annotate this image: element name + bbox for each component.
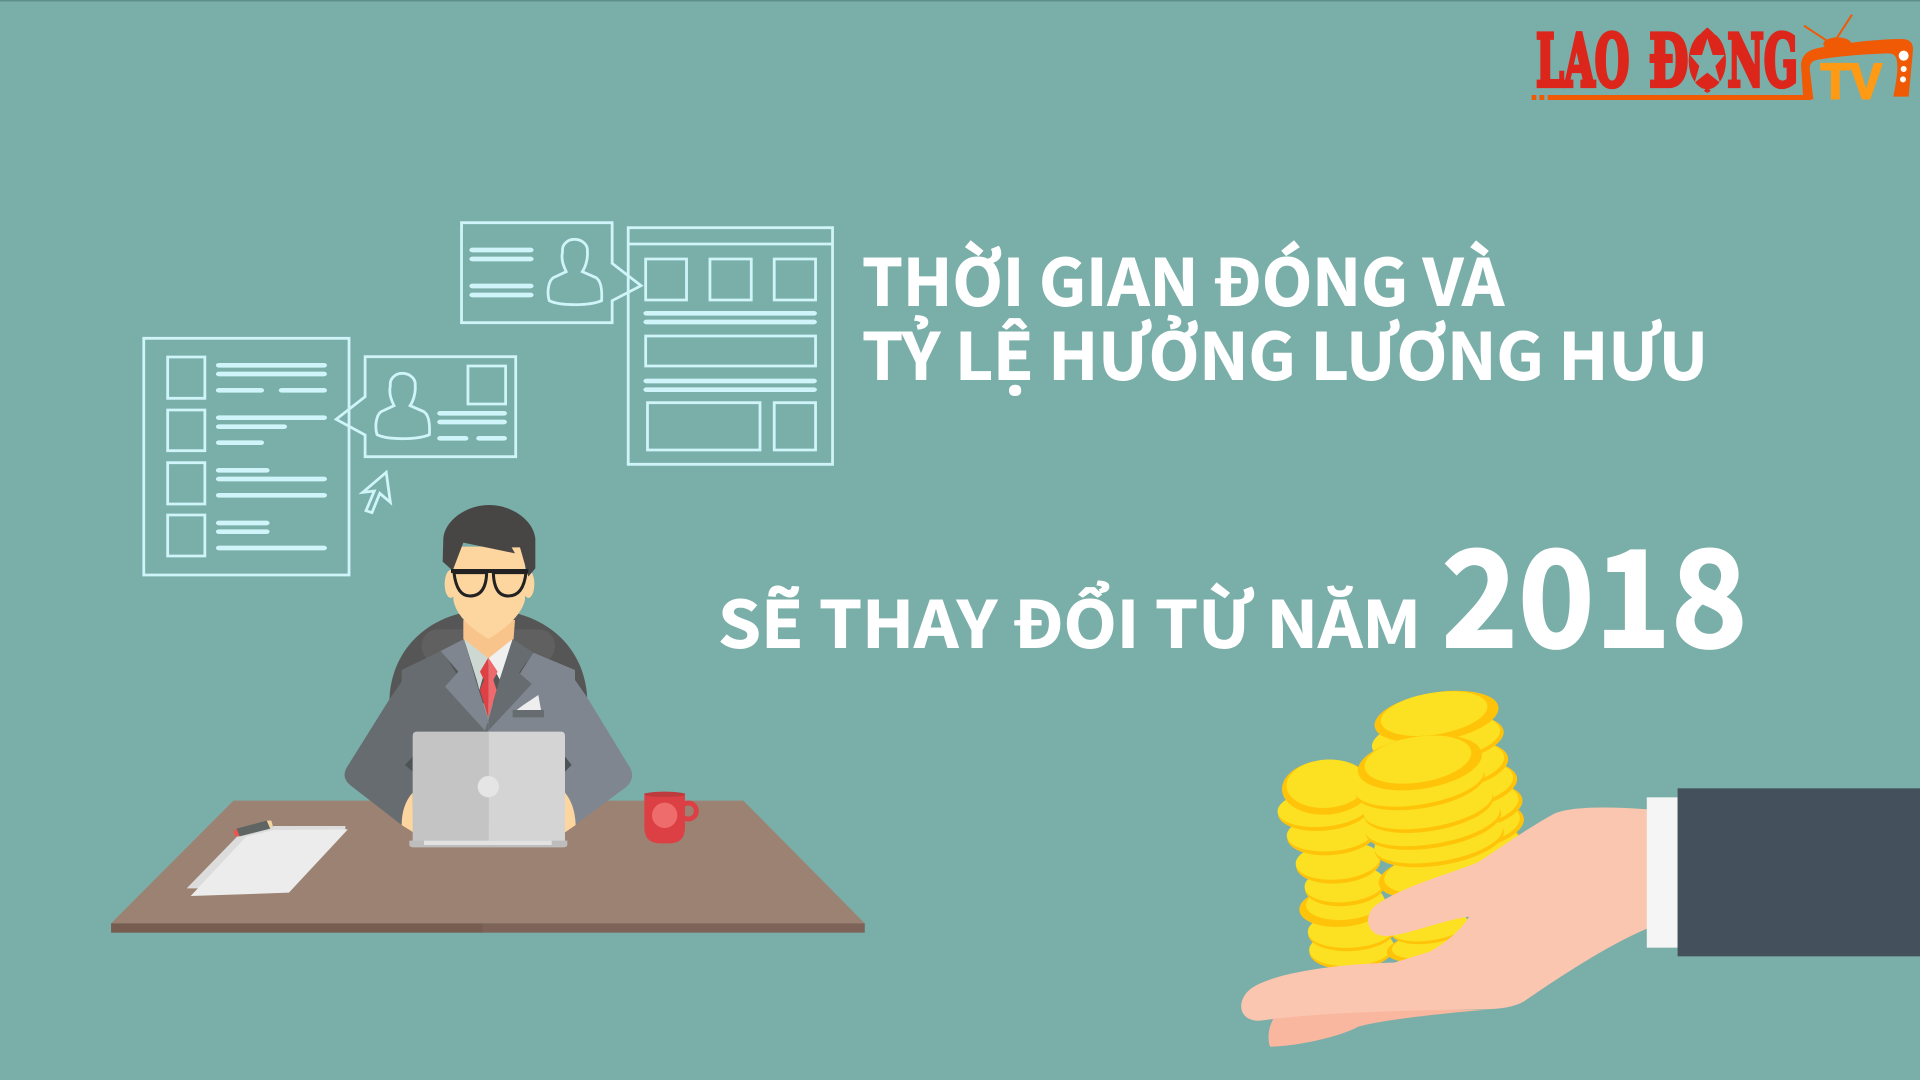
laptop <box>409 732 567 847</box>
icon: cursor arrow <box>363 472 390 513</box>
hand holding coins <box>1241 682 1920 1047</box>
neck and shirt <box>463 620 515 690</box>
logo: Lao Dong TV <box>1532 15 1913 110</box>
hand <box>1241 807 1648 1021</box>
glasses <box>451 571 528 596</box>
logo TV set <box>1801 15 1913 110</box>
left profile callout <box>336 357 516 457</box>
head <box>443 505 535 639</box>
logo wordmark <box>1536 19 1798 103</box>
year 2018: 2018 <box>1442 492 1748 686</box>
outline document illustrations <box>144 223 833 575</box>
title line 2: TỶ LỆ HƯỞNG LƯƠNG HƯU <box>862 306 1708 398</box>
right document panel <box>628 228 833 464</box>
papers <box>187 826 348 896</box>
lower finger <box>1269 1010 1483 1047</box>
logo TV set: TV <box>1821 54 1882 110</box>
left coin column <box>1274 754 1398 973</box>
desk front edge <box>111 923 865 933</box>
left document panel <box>144 338 349 575</box>
pocket square <box>513 695 544 717</box>
logo wordmark: Đ <box>1649 19 1688 103</box>
necktie <box>480 658 498 718</box>
back coin column <box>1366 682 1530 880</box>
suit sleeve <box>1678 788 1920 956</box>
pencil <box>234 821 273 836</box>
front coin column <box>1348 726 1511 967</box>
desk top <box>111 801 865 923</box>
man at laptop <box>345 505 696 847</box>
office chair <box>389 610 587 703</box>
top profile callout <box>462 223 641 323</box>
shirt cuff <box>1647 797 1678 948</box>
coffee mug <box>644 792 696 843</box>
title line 3: SẼ THAY ĐỔI TỪ NĂM <box>718 574 1421 666</box>
hands <box>402 793 576 832</box>
title line 1: THỜI GIAN ĐÓNG VÀ <box>862 232 1505 324</box>
jacket <box>345 651 632 825</box>
logo underline <box>1532 95 1811 100</box>
logo wordmark: NG <box>1727 19 1798 103</box>
desk <box>111 801 865 933</box>
title text <box>718 232 1748 686</box>
coin stack <box>1274 682 1530 973</box>
logo wordmark: LAO <box>1536 19 1629 103</box>
jacket lapels <box>441 639 533 731</box>
